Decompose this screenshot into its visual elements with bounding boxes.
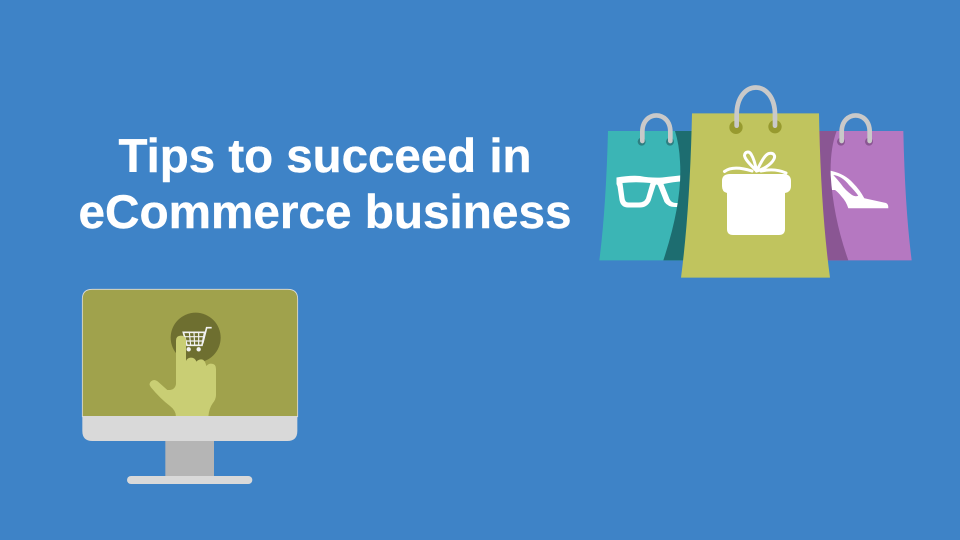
teal bag with glasses <box>599 115 693 260</box>
hand pointing <box>149 336 216 417</box>
olive bag with gift <box>681 87 830 278</box>
icon: shopping cart <box>183 328 212 351</box>
monitor stand <box>165 441 214 477</box>
monitor chin <box>82 416 297 441</box>
icon: gift box <box>722 152 791 235</box>
monitor screen <box>82 289 298 417</box>
illustration: shopping bags <box>599 87 912 278</box>
cart button circle <box>171 313 221 363</box>
monitor base <box>127 476 252 484</box>
title: Tips to succeed in <box>118 130 532 183</box>
illustration: desktop monitor with hand and cart <box>82 289 298 484</box>
purple bag with shoe <box>817 115 912 260</box>
icon: high-heel shoe <box>825 169 888 208</box>
title: eCommerce business <box>78 186 572 239</box>
title <box>78 130 572 239</box>
icon: glasses <box>616 175 685 207</box>
